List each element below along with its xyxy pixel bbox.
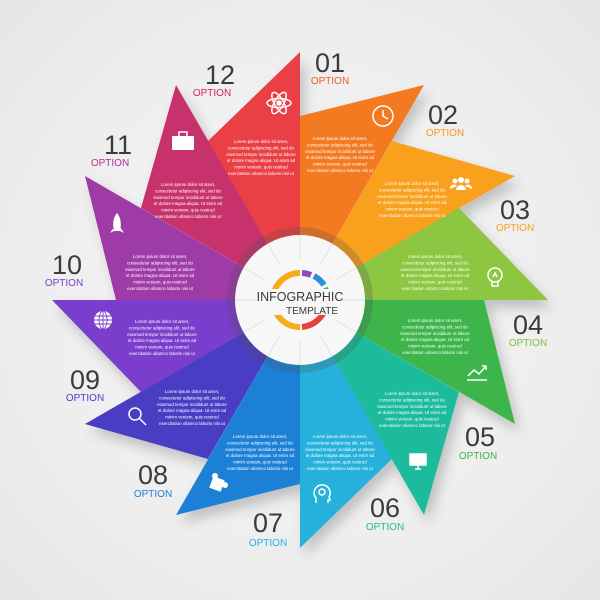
icon: globe bbox=[94, 311, 112, 329]
text 11: exercitation ullamco laboris nisi ut bbox=[155, 214, 222, 219]
text 02: exercitation ullamco laboris nisi ut bbox=[379, 213, 446, 218]
label 11: 11 bbox=[104, 130, 132, 160]
label 03: 03 bbox=[500, 195, 530, 225]
text 09: exercitation ullamco laboris nisi ut bbox=[129, 351, 196, 356]
label 09: OPTION bbox=[66, 393, 104, 404]
text 01: minim veniam, quis nostrud bbox=[313, 162, 367, 167]
text 10: consectetur adipiscing elit, sed do bbox=[127, 260, 194, 265]
text 06: et dolore magna aliqua. Ut enim ad bbox=[306, 453, 375, 458]
text 06: Lorem ipsum dolor sit amet, bbox=[313, 434, 367, 439]
text 05: minim veniam, quis nostrud bbox=[385, 417, 439, 422]
text 02: consectetur adipiscing elit, sed do bbox=[379, 187, 446, 192]
text 07: exercitation ullamco laboris nisi ut bbox=[227, 466, 294, 471]
center hub bbox=[231, 231, 369, 369]
text 12: exercitation ullamco laboris nisi ut bbox=[228, 171, 295, 176]
text 08: exercitation ullamco laboris nisi ut bbox=[159, 421, 226, 426]
text 12: minim veniam, quis nostrud bbox=[234, 165, 288, 170]
text 06 bbox=[305, 434, 375, 471]
text 07: eiusmod tempor incididunt ut labore bbox=[225, 447, 295, 452]
label 12: 12 bbox=[205, 60, 235, 90]
text 11: et dolore magna aliqua. Ut enim ad bbox=[154, 201, 223, 206]
text 07: et dolore magna aliqua. Ut enim ad bbox=[226, 453, 295, 458]
icon: briefcase bbox=[172, 132, 194, 150]
icon: bulb bbox=[488, 268, 502, 286]
label 03 bbox=[496, 195, 534, 234]
text 06: eiusmod tempor incididunt ut labore bbox=[305, 447, 375, 452]
blade 06 bbox=[300, 300, 392, 548]
label 04: 04 bbox=[513, 310, 543, 340]
text 04: et dolore magna aliqua. Ut enim ad bbox=[401, 337, 470, 342]
text 08: consectetur adipiscing elit, sed do bbox=[159, 395, 226, 400]
text 03: exercitation ullamco laboris nisi ut bbox=[402, 286, 469, 291]
text 05 bbox=[377, 391, 447, 428]
text 10: et dolore magna aliqua. Ut enim ad bbox=[126, 273, 195, 278]
blade 05 bbox=[300, 300, 459, 515]
label 01: OPTION bbox=[311, 76, 349, 87]
blade 03 bbox=[300, 208, 548, 300]
blade 09 bbox=[52, 300, 300, 392]
text 04: exercitation ullamco laboris nisi ut bbox=[402, 350, 469, 355]
icon: magnifier bbox=[129, 408, 146, 425]
label 05: 05 bbox=[465, 422, 495, 452]
label 10: 10 bbox=[52, 250, 82, 280]
label 01: 01 bbox=[315, 48, 345, 78]
text 04 bbox=[400, 318, 470, 355]
text 03 bbox=[400, 254, 470, 291]
text 10: exercitation ullamco laboris nisi ut bbox=[127, 286, 194, 291]
label 06 bbox=[366, 493, 404, 533]
label 11 bbox=[91, 130, 132, 169]
text 11 bbox=[153, 182, 223, 219]
label 02: 02 bbox=[428, 100, 458, 130]
text 11: consectetur adipiscing elit, sed do bbox=[155, 188, 222, 193]
text 01 bbox=[305, 136, 375, 173]
text 08: minim veniam, quis nostrud bbox=[165, 415, 219, 420]
text 01: Lorem ipsum dolor sit amet, bbox=[313, 136, 367, 141]
donut chart bbox=[273, 273, 327, 327]
pinwheel blades bbox=[52, 52, 548, 548]
label 06: 06 bbox=[370, 493, 400, 523]
blade 10 bbox=[85, 176, 300, 300]
text 02: minim veniam, quis nostrud bbox=[385, 207, 439, 212]
icon: puzzle bbox=[209, 473, 228, 492]
icon: atom bbox=[267, 90, 291, 116]
label 09 bbox=[66, 365, 104, 404]
blade 07 bbox=[176, 300, 300, 515]
label 10 bbox=[45, 250, 83, 289]
text 05: exercitation ullamco laboris nisi ut bbox=[379, 423, 446, 428]
text 02 bbox=[377, 181, 447, 218]
text 11: Lorem ipsum dolor sit amet, bbox=[161, 182, 215, 187]
icons bbox=[94, 90, 502, 503]
icon: head bbox=[314, 485, 330, 503]
text 02: Lorem ipsum dolor sit amet, bbox=[385, 181, 439, 186]
text 01: exercitation ullamco laboris nisi ut bbox=[307, 168, 374, 173]
text 12: consectetur adipiscing elit, sed do bbox=[228, 145, 295, 150]
text 09: et dolore magna aliqua. Ut enim ad bbox=[128, 338, 197, 343]
text 04: consectetur adipiscing elit, sed do bbox=[402, 324, 469, 329]
text 06: consectetur adipiscing elit, sed do bbox=[307, 440, 374, 445]
text 07 bbox=[225, 434, 295, 471]
text 03: et dolore magna aliqua. Ut enim ad bbox=[401, 273, 470, 278]
center hub: TEMPLATE bbox=[286, 306, 338, 317]
text 11: eiusmod tempor incididunt ut labore bbox=[153, 195, 223, 200]
label 08: OPTION bbox=[134, 489, 172, 500]
text 09: Lorem ipsum dolor sit amet, bbox=[135, 319, 189, 324]
text 09: eiusmod tempor incididunt ut labore bbox=[127, 332, 197, 337]
label 03: OPTION bbox=[496, 223, 534, 234]
icon: monitor bbox=[410, 454, 426, 469]
icon: rocket bbox=[110, 213, 124, 233]
label 04 bbox=[509, 310, 547, 349]
text 01: consectetur adipiscing elit, sed do bbox=[307, 142, 374, 147]
text 10: minim veniam, quis nostrud bbox=[133, 280, 187, 285]
text 03: consectetur adipiscing elit, sed do bbox=[402, 260, 469, 265]
text 05: Lorem ipsum dolor sit amet, bbox=[385, 391, 439, 396]
text 10: Lorem ipsum dolor sit amet, bbox=[133, 254, 187, 259]
text 08: eiusmod tempor incididunt ut labore bbox=[157, 402, 227, 407]
text 09 bbox=[127, 319, 197, 356]
label 12 bbox=[193, 60, 235, 99]
text blocks bbox=[125, 136, 470, 471]
text 03: Lorem ipsum dolor sit amet, bbox=[408, 254, 462, 259]
text 06: exercitation ullamco laboris nisi ut bbox=[307, 466, 374, 471]
label 05 bbox=[459, 422, 497, 462]
text 07: minim veniam, quis nostrud bbox=[233, 460, 287, 465]
blade 01 bbox=[300, 85, 424, 300]
center title bbox=[262, 289, 338, 315]
blade 04 bbox=[300, 300, 515, 424]
label 04: OPTION bbox=[509, 338, 547, 349]
text 04: minim veniam, quis nostrud bbox=[408, 344, 462, 349]
text 03: minim veniam, quis nostrud bbox=[408, 280, 462, 285]
text 09: consectetur adipiscing elit, sed do bbox=[129, 325, 196, 330]
option labels bbox=[45, 48, 547, 549]
text 09: minim veniam, quis nostrud bbox=[135, 345, 189, 350]
text 07: Lorem ipsum dolor sit amet, bbox=[233, 434, 287, 439]
text 08: Lorem ipsum dolor sit amet, bbox=[165, 389, 219, 394]
text 12 bbox=[226, 139, 296, 176]
label 11: OPTION bbox=[91, 158, 129, 169]
label 12: OPTION bbox=[193, 88, 231, 99]
icon: chart bbox=[467, 366, 487, 380]
blade 12 bbox=[208, 52, 300, 300]
label 07: OPTION bbox=[249, 538, 287, 549]
text 02: et dolore magna aliqua. Ut enim ad bbox=[378, 200, 447, 205]
icon: people bbox=[450, 177, 472, 190]
text 04: Lorem ipsum dolor sit amet, bbox=[408, 318, 462, 323]
text 10: eiusmod tempor incididunt ut labore bbox=[125, 267, 195, 272]
text 08: et dolore magna aliqua. Ut enim ad bbox=[158, 408, 227, 413]
label 01 bbox=[311, 48, 349, 87]
text 08 bbox=[157, 389, 227, 426]
text 01: et dolore magna aliqua. Ut enim ad bbox=[306, 155, 375, 160]
label 02: OPTION bbox=[426, 128, 464, 139]
label 10: OPTION bbox=[45, 278, 83, 289]
label 05: OPTION bbox=[459, 451, 497, 462]
text 05: et dolore magna aliqua. Ut enim ad bbox=[378, 410, 447, 415]
label 06: OPTION bbox=[366, 522, 404, 533]
label 08 bbox=[134, 460, 172, 500]
text 11: minim veniam, quis nostrud bbox=[161, 208, 215, 213]
center hub: INFOGRAPHIC bbox=[257, 290, 343, 304]
text 10 bbox=[125, 254, 195, 291]
label 09: 09 bbox=[70, 365, 100, 395]
text 03: eiusmod tempor incididunt ut labore bbox=[400, 267, 470, 272]
text 05: consectetur adipiscing elit, sed do bbox=[379, 397, 446, 402]
text 05: eiusmod tempor incididunt ut labore bbox=[377, 404, 447, 409]
text 06: minim veniam, quis nostrud bbox=[313, 460, 367, 465]
label 07: 07 bbox=[253, 508, 283, 538]
text 12: et dolore magna aliqua. Ut enim ad bbox=[227, 158, 296, 163]
text 12: eiusmod tempor incididunt ut labore bbox=[226, 152, 296, 157]
text 02: eiusmod tempor incididunt ut labore bbox=[377, 194, 447, 199]
label 07 bbox=[249, 508, 287, 549]
text 07: consectetur adipiscing elit, sed do bbox=[227, 440, 294, 445]
text 04: eiusmod tempor incididunt ut labore bbox=[400, 331, 470, 336]
label 08: 08 bbox=[138, 460, 168, 490]
label 02 bbox=[426, 100, 464, 139]
blade 11 bbox=[141, 85, 300, 300]
icon: clock bbox=[373, 106, 393, 126]
text 01: eiusmod tempor incididunt ut labore bbox=[305, 149, 375, 154]
blade 08 bbox=[85, 300, 300, 459]
text 12: Lorem ipsum dolor sit amet, bbox=[234, 139, 288, 144]
blade 02 bbox=[300, 141, 515, 300]
